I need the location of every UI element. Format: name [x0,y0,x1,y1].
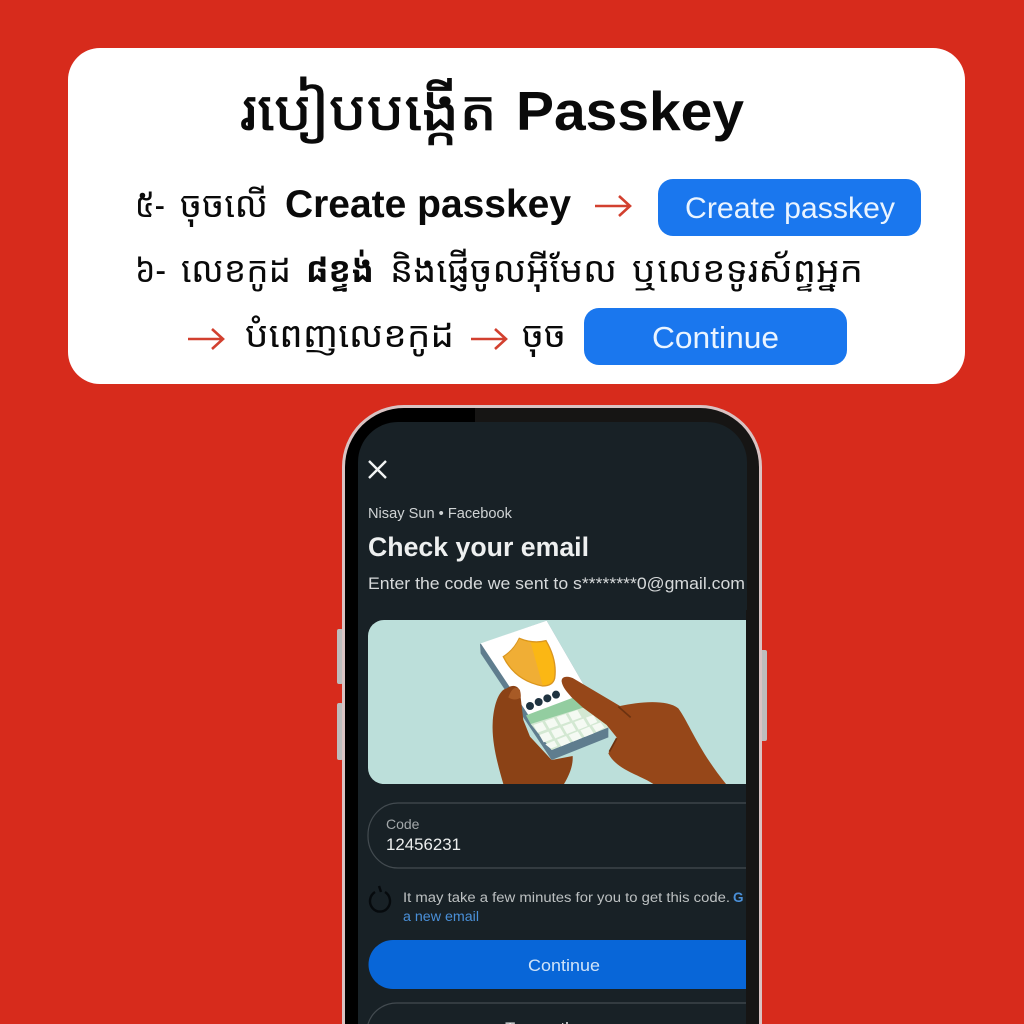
icon: spinner [370,886,390,912]
arrow: step 6 second [471,329,506,349]
step 5 text: Create passkey [285,183,572,226]
click text: ចុច [522,314,566,357]
arrow: step 6 first [188,329,223,349]
icon: shield [503,638,555,686]
button: Continue: Continue [652,320,779,355]
screen heading: Check your email [368,532,589,562]
account label: Nisay Sun • Facebook [368,506,513,522]
step 6 text [135,248,863,292]
resend notice: It may take a few minutes for you to get this code. [403,890,730,905]
step 6 text: ៨ខ្ទង់ [306,249,374,292]
step 5 text: ចុចលើ [180,184,268,227]
step 6 text: ឬលេខទូរស័ព្ទអ្នក [632,249,863,292]
right hand [562,677,726,784]
code input field: 12456231 [386,835,461,854]
title: របៀបបង្កើត [240,76,497,145]
resend notice: G [733,890,744,905]
fill code text: បំពេញលេខកូដ [245,314,454,357]
title: Passkey [516,80,744,142]
icon: close [369,461,386,478]
step 5 text: ៥- [135,184,165,225]
screen bezel mask right [746,610,758,1024]
button: Create passkey [658,179,921,236]
button: screen Continue [368,940,746,989]
illustrated phone body [480,621,608,760]
step 5 text [135,183,572,227]
button: try another way [368,1003,746,1024]
arrow: step 5 [595,196,630,216]
title [240,76,744,145]
resend notice: a new email [403,909,479,924]
step 6 text: លេខកូដ [181,249,291,292]
panel: instructions card [68,48,965,384]
left hand [493,686,573,784]
resend notice [403,890,744,924]
phone frame [342,405,762,1024]
step 6 text: និងផ្ញើចូលអ៊ីមែល [390,248,617,292]
phone side buttons [337,629,767,760]
button: Create passkey: Create passkey [685,192,895,225]
illustration: hands holding phone [368,620,746,784]
phone screen [358,422,758,1024]
password stars [526,691,560,710]
phone mockup [337,405,767,1024]
code input field [368,803,746,868]
step 6 text: ៦- [135,249,166,290]
keypad keys [533,710,604,749]
button: Continue [584,308,847,365]
code input field: Code [386,816,420,832]
screen subtext: Enter the code we sent to s********0@gmail.com [368,575,745,593]
button: screen Continue: Continue [528,957,600,975]
